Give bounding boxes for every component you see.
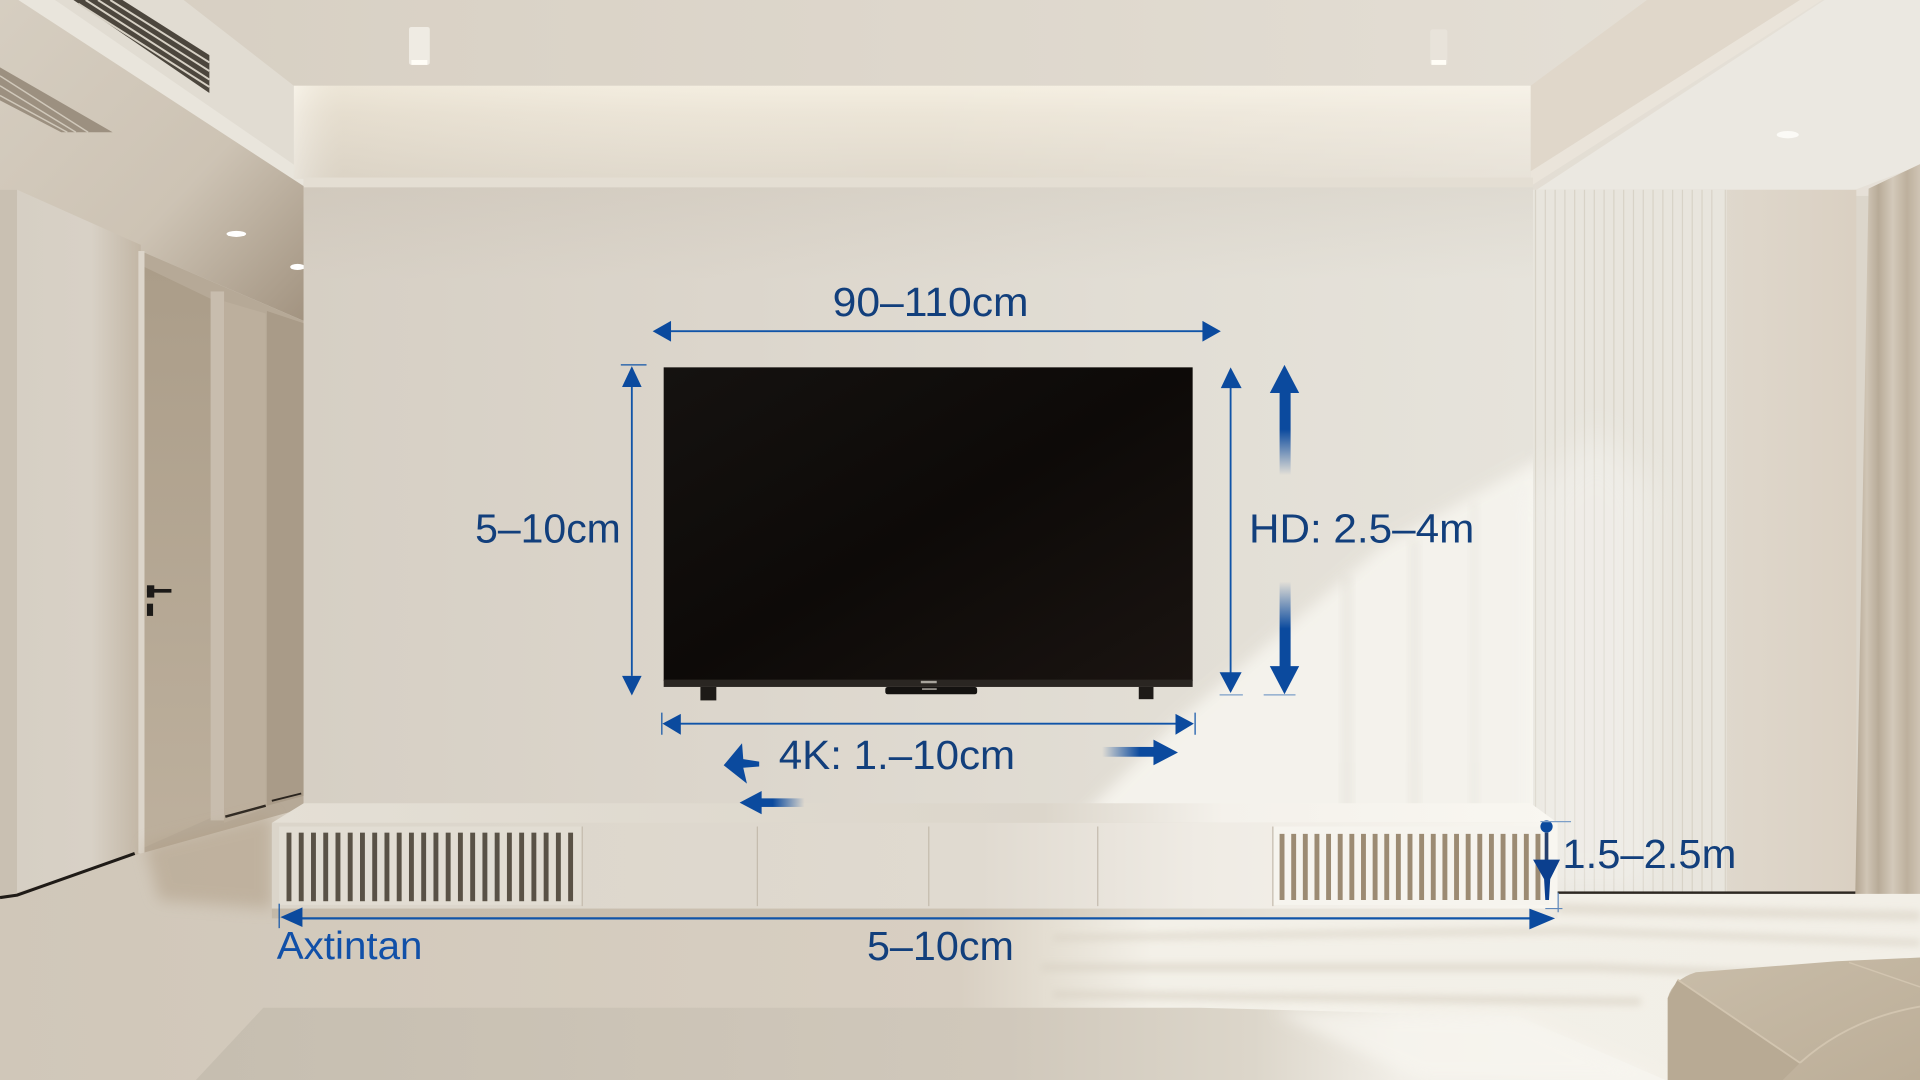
arrow: lower left (740, 791, 804, 814)
dimension: left height (475, 365, 647, 696)
main wall (304, 178, 1545, 820)
arrow: small left (724, 743, 759, 784)
hallway floor glow (144, 814, 272, 909)
left vent (287, 833, 573, 901)
hallway ceiling (0, 0, 304, 321)
door handle (147, 585, 171, 616)
floor sun streaks (1041, 909, 1920, 1002)
rug (196, 1008, 1665, 1080)
label: 4K: 1.–10cm: 4K: 1.–10cm (779, 732, 1015, 778)
dimension: console width (277, 904, 1555, 969)
slat panel (1533, 190, 1727, 894)
label: 90–110cm: 90–110cm (833, 279, 1029, 325)
right ceiling (1537, 0, 1920, 190)
ceiling (0, 0, 1920, 321)
television (664, 367, 1193, 700)
dimension: viewing height (1533, 820, 1736, 912)
downlights (227, 231, 246, 237)
ac vent upper (73, 0, 209, 93)
label: 5–10cm: 5–10cm (475, 505, 621, 551)
moulding (304, 178, 1533, 187)
floor (0, 793, 1920, 1080)
sunlight on wall (1092, 462, 1533, 805)
arrow: right (1102, 740, 1178, 765)
track light left (409, 27, 430, 65)
right vent (1280, 834, 1540, 900)
track light right (1430, 29, 1447, 65)
thick arrow up (1270, 365, 1299, 475)
dimension: right viewing distance (1220, 365, 1474, 695)
left ceiling beam (55, 0, 304, 184)
dimension: top width (653, 279, 1221, 342)
label: 1.5–2.5m: 1.5–2.5m (1562, 831, 1736, 877)
sofa (1668, 958, 1920, 1080)
right beam (1531, 0, 1800, 171)
label: Axtintan: Axtintan (277, 925, 422, 968)
door (138, 251, 304, 853)
thick arrow down (1270, 582, 1299, 694)
tv console (272, 803, 1558, 918)
ac vent lower (0, 67, 113, 132)
label: 5–10cm: 5–10cm (867, 923, 1014, 969)
curtain (1855, 164, 1920, 921)
label: HD: 2.5–4m: HD: 2.5–4m (1249, 505, 1474, 551)
hallway walls and door (0, 190, 304, 898)
baseboard right (1558, 891, 1856, 896)
dimension: 4K distance (662, 713, 1195, 814)
light cove (294, 86, 1531, 179)
right wall, slats and curtain (1533, 164, 1920, 921)
